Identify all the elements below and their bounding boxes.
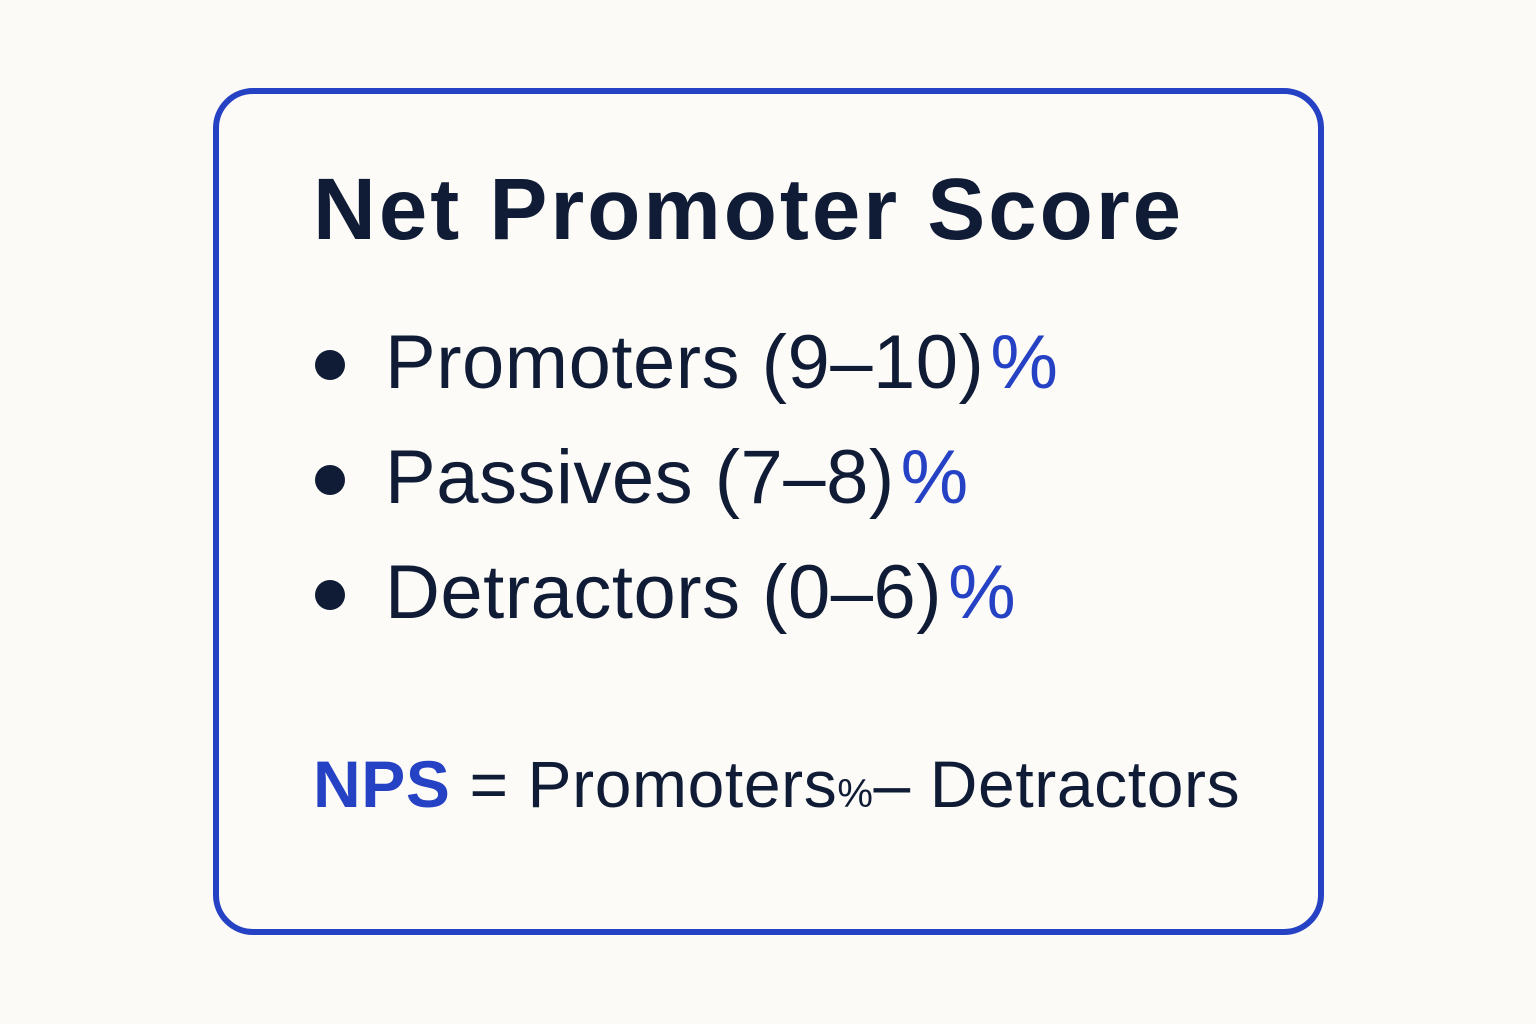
bullet: passives: Passives (7–8)% xyxy=(385,435,969,520)
formula: NPS = Promoters%– Detractors xyxy=(313,747,1240,821)
bullet: detractors: Detractors (0–6)% xyxy=(385,550,1016,635)
title: Net Promoter Score xyxy=(313,161,1184,258)
card panel xyxy=(213,88,1324,935)
bullet: promoters: Promoters (9–10)% xyxy=(385,320,1058,405)
